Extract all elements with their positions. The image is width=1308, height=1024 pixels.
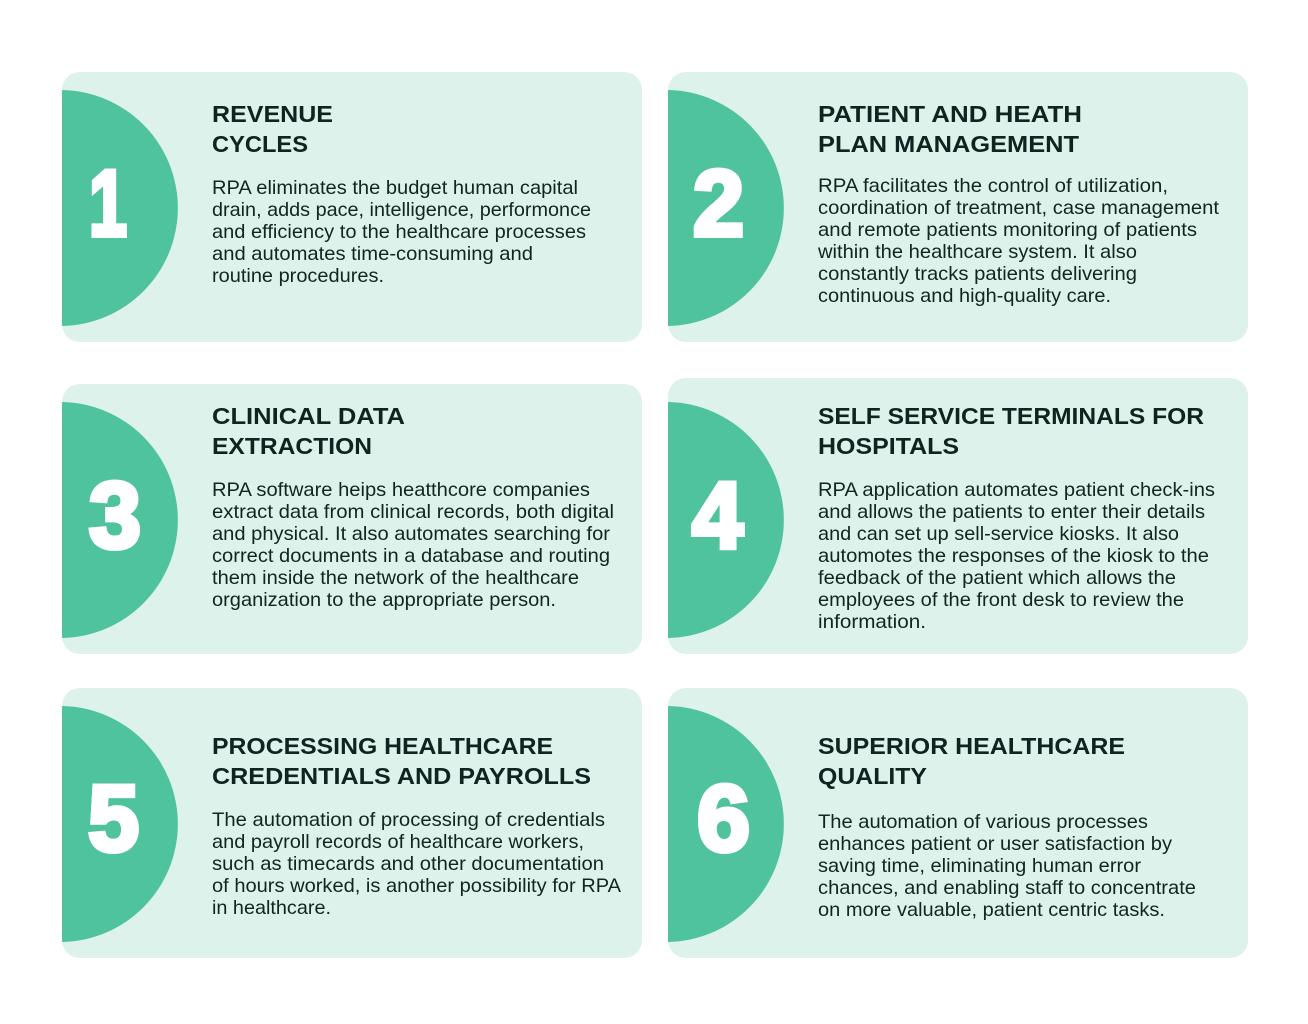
- panel: clinical data extraction: [62, 384, 642, 654]
- body text 2: within the healthcare system. It also: [817, 241, 1137, 263]
- card background 1: [62, 72, 642, 342]
- body text 6: enhances patient or user satisfaction by: [818, 833, 1172, 855]
- heading 2: [818, 101, 1082, 157]
- body text 5: such as timecards and other documentation: [212, 853, 604, 875]
- panel: patient and health plan management: [668, 72, 1248, 342]
- body text 4: and can set up sell-service kiosks. It also: [818, 523, 1179, 545]
- body text 1: RPA eliminates the budget human capital: [212, 177, 578, 199]
- panel: self service terminals for hospitals: [668, 378, 1248, 654]
- body text 1: and automates time-consuming and: [212, 243, 533, 265]
- heading 1: CYCLES: [212, 131, 308, 157]
- body text 1: drain, adds pace, intelligence, performonce: [212, 199, 591, 221]
- body text 6: [818, 811, 1196, 921]
- heading 3: CLINICAL DATA: [212, 403, 405, 429]
- semicircle 2: [668, 90, 784, 326]
- number 5: 5: [88, 766, 139, 870]
- heading 4: HOSPITALS: [818, 433, 959, 459]
- heading 4: SELF SERVICE TERMINALS FOR: [818, 403, 1204, 429]
- semicircle 3: [62, 402, 178, 638]
- body text 5: [212, 809, 621, 919]
- number 2: 2: [693, 150, 744, 256]
- heading 2: PLAN MANAGEMENT: [818, 131, 1080, 157]
- heading 3: [212, 403, 405, 459]
- body text 4: and allows the patients to enter their details: [818, 501, 1205, 523]
- body text 3: [212, 479, 614, 611]
- body text 2: RPA facilitates the control of utilization,: [818, 175, 1168, 197]
- number 3: 3: [89, 462, 141, 568]
- heading 5: [212, 733, 591, 789]
- body text 2: [817, 175, 1220, 307]
- body text 6: The automation of various processes: [818, 811, 1148, 833]
- heading 1: REVENUE: [212, 101, 333, 127]
- heading 4: [818, 403, 1204, 459]
- body text 3: RPA software heips heatthcore companies: [212, 479, 590, 501]
- panel: processing healthcare credentials and payrolls: [62, 688, 642, 958]
- body text 4: information.: [818, 611, 926, 633]
- body text 6: chances, and enabling staff to concentrate: [818, 877, 1196, 899]
- body text 6: on more valuable, patient centric tasks.: [818, 899, 1165, 921]
- card background 5: [62, 688, 642, 958]
- heading 1: [212, 101, 333, 157]
- card background 6: [668, 688, 1248, 958]
- heading 6: [818, 733, 1125, 789]
- semicircle 4: [668, 402, 784, 638]
- semicircle 1: [62, 90, 178, 326]
- body text 5: The automation of processing of credentials: [212, 809, 605, 831]
- heading 6: SUPERIOR HEALTHCARE: [818, 733, 1125, 759]
- card background 2: [668, 72, 1248, 342]
- body text 4: automotes the responses of the kiosk to the: [818, 545, 1209, 567]
- number 1: 1: [89, 150, 127, 256]
- number 6: 6: [697, 766, 750, 870]
- body text 5: of hours worked, is another possibility for RPA: [212, 875, 621, 897]
- body text 3: them inside the network of the healthcare: [212, 567, 579, 589]
- semicircle 5: [62, 706, 178, 942]
- card background 4: [668, 378, 1248, 654]
- semicircle 6: [668, 706, 784, 942]
- heading 5: CREDENTIALS AND PAYROLLS: [212, 763, 591, 789]
- body text 4: [818, 479, 1215, 633]
- body text 1: and efficiency to the healthcare processes: [212, 221, 586, 243]
- body text 2: and remote patients monitoring of patients: [818, 219, 1197, 241]
- body text 2: constantly tracks patients delivering: [818, 263, 1137, 285]
- body text 4: RPA application automates patient check-ins: [818, 479, 1215, 501]
- body text 2: coordination of treatment, case management: [818, 197, 1220, 219]
- heading 6: QUALITY: [818, 763, 927, 789]
- heading 3: EXTRACTION: [212, 433, 372, 459]
- body text 1: routine procedures.: [212, 265, 384, 287]
- body text 5: and payroll records of healthcare workers,: [212, 831, 584, 853]
- panel: revenue cycles: [62, 72, 642, 342]
- number 4: 4: [692, 462, 743, 568]
- body text 3: organization to the appropriate person.: [212, 589, 556, 611]
- body text 3: correct documents in a database and routing: [212, 545, 610, 567]
- body text 2: continuous and high-quality care.: [818, 285, 1111, 307]
- heading 5: PROCESSING HEALTHCARE: [212, 733, 553, 759]
- body text 6: saving time, eliminating human error: [818, 855, 1142, 877]
- body text 1: [212, 177, 591, 287]
- body text 4: feedback of the patient which allows the: [818, 567, 1176, 589]
- panel: superior healthcare quality: [668, 688, 1248, 958]
- card background 3: [62, 384, 642, 654]
- body text 3: and physical. It also automates searching for: [212, 523, 611, 545]
- body text 3: extract data from clinical records, both digital: [212, 501, 614, 523]
- body text 4: employees of the front desk to review the: [818, 589, 1184, 611]
- body text 5: in healthcare.: [212, 897, 331, 919]
- heading 2: PATIENT AND HEATH: [818, 101, 1082, 127]
